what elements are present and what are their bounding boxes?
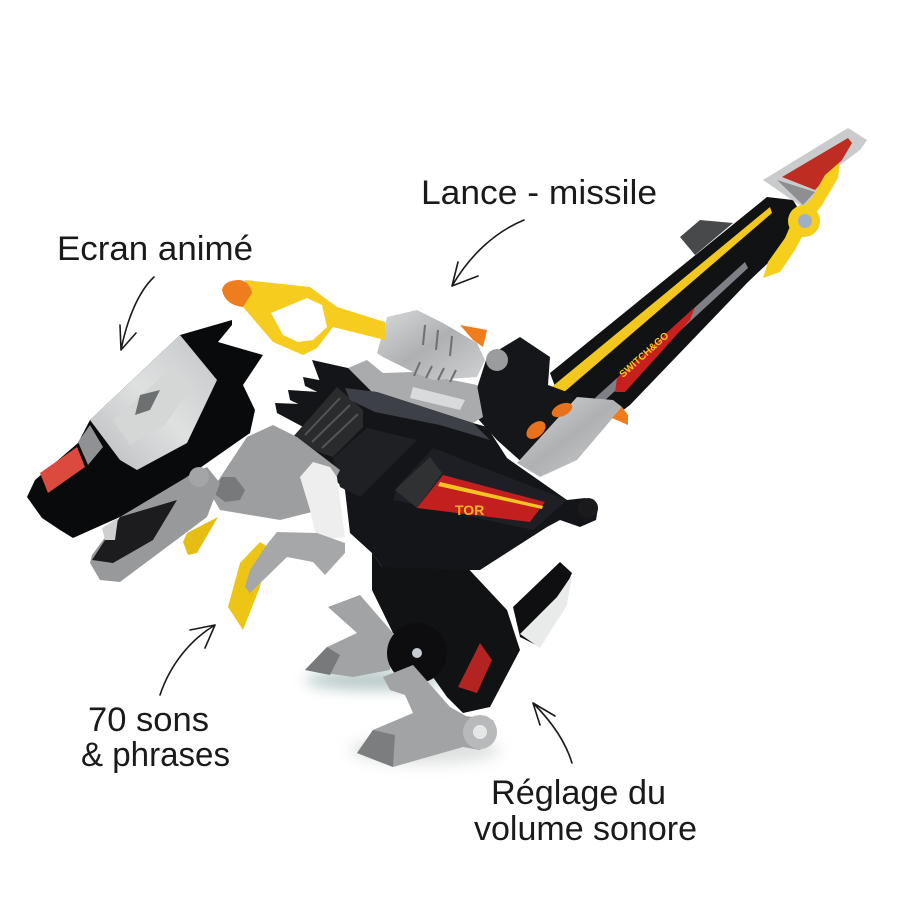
label: Reglage du volume sonore: volume sonore [474,810,697,848]
red Raptor label [417,475,545,522]
white arm [300,462,345,540]
wheel [387,623,447,683]
yellow claw [228,542,268,630]
red leg panel [458,643,492,693]
arrow: to screen [120,277,154,350]
leg [372,553,572,713]
silver bolt [486,349,508,371]
screen display [113,365,192,445]
orange missile tip [222,280,252,307]
neck [210,425,340,520]
rear foot [305,595,393,677]
label: Lance - missile: Lance - missile [421,174,657,212]
small yellow claw [183,517,218,555]
Switch and Go label [615,307,695,392]
screen window [90,335,217,470]
yellow missile handle [243,280,385,355]
toy dinosaur robot [27,128,867,767]
tail [548,128,867,420]
label: 70 sons & phrases [81,625,230,774]
arrow: to claw [160,625,215,695]
arrow: to launcher [452,220,524,286]
label: Ecran anime: Ecran animé [57,230,253,268]
hip pivot [578,498,598,518]
red nose light [40,447,85,493]
label: Lance - missile [421,174,657,286]
tail tip [763,128,867,207]
ground shadow [305,670,500,764]
head shell [27,320,263,538]
label: 70 sons & phrases: 70 sons [88,701,209,739]
grey claw [245,532,345,593]
grey base behind plate [345,360,483,423]
launcher black block [470,337,575,465]
yellow propeller [763,162,840,278]
arm and neck [210,425,345,630]
label: 70 sons & phrases: & phrases [81,736,230,774]
tail fin [680,220,733,255]
front foot [357,665,497,767]
main body [275,360,628,570]
arrow: to leg [533,703,572,763]
silver tail joint [517,397,622,477]
tail beam [550,197,808,420]
neck bolt [212,477,245,502]
red Raptor label: TOR [455,502,484,518]
label: Reglage du volume sonore [474,703,697,848]
pivot disc [189,467,209,487]
jaw [90,467,220,582]
orange buttons [549,400,575,420]
textured shoulder panel [293,387,363,457]
leg flap [513,562,572,647]
label: Reglage du volume sonore: Réglage du [491,774,666,812]
hip plate [393,448,567,530]
Switch and Go label: SWITCH&GO [618,330,671,380]
yellow stripe [548,207,772,399]
textured hex panel [333,428,417,497]
back spikes [275,360,372,428]
label: Ecran anime [57,230,253,350]
missile launcher [222,280,575,465]
orange cap [460,325,487,347]
head [27,320,263,582]
top plate highlight [345,388,490,440]
silver launcher barrel [377,310,485,380]
